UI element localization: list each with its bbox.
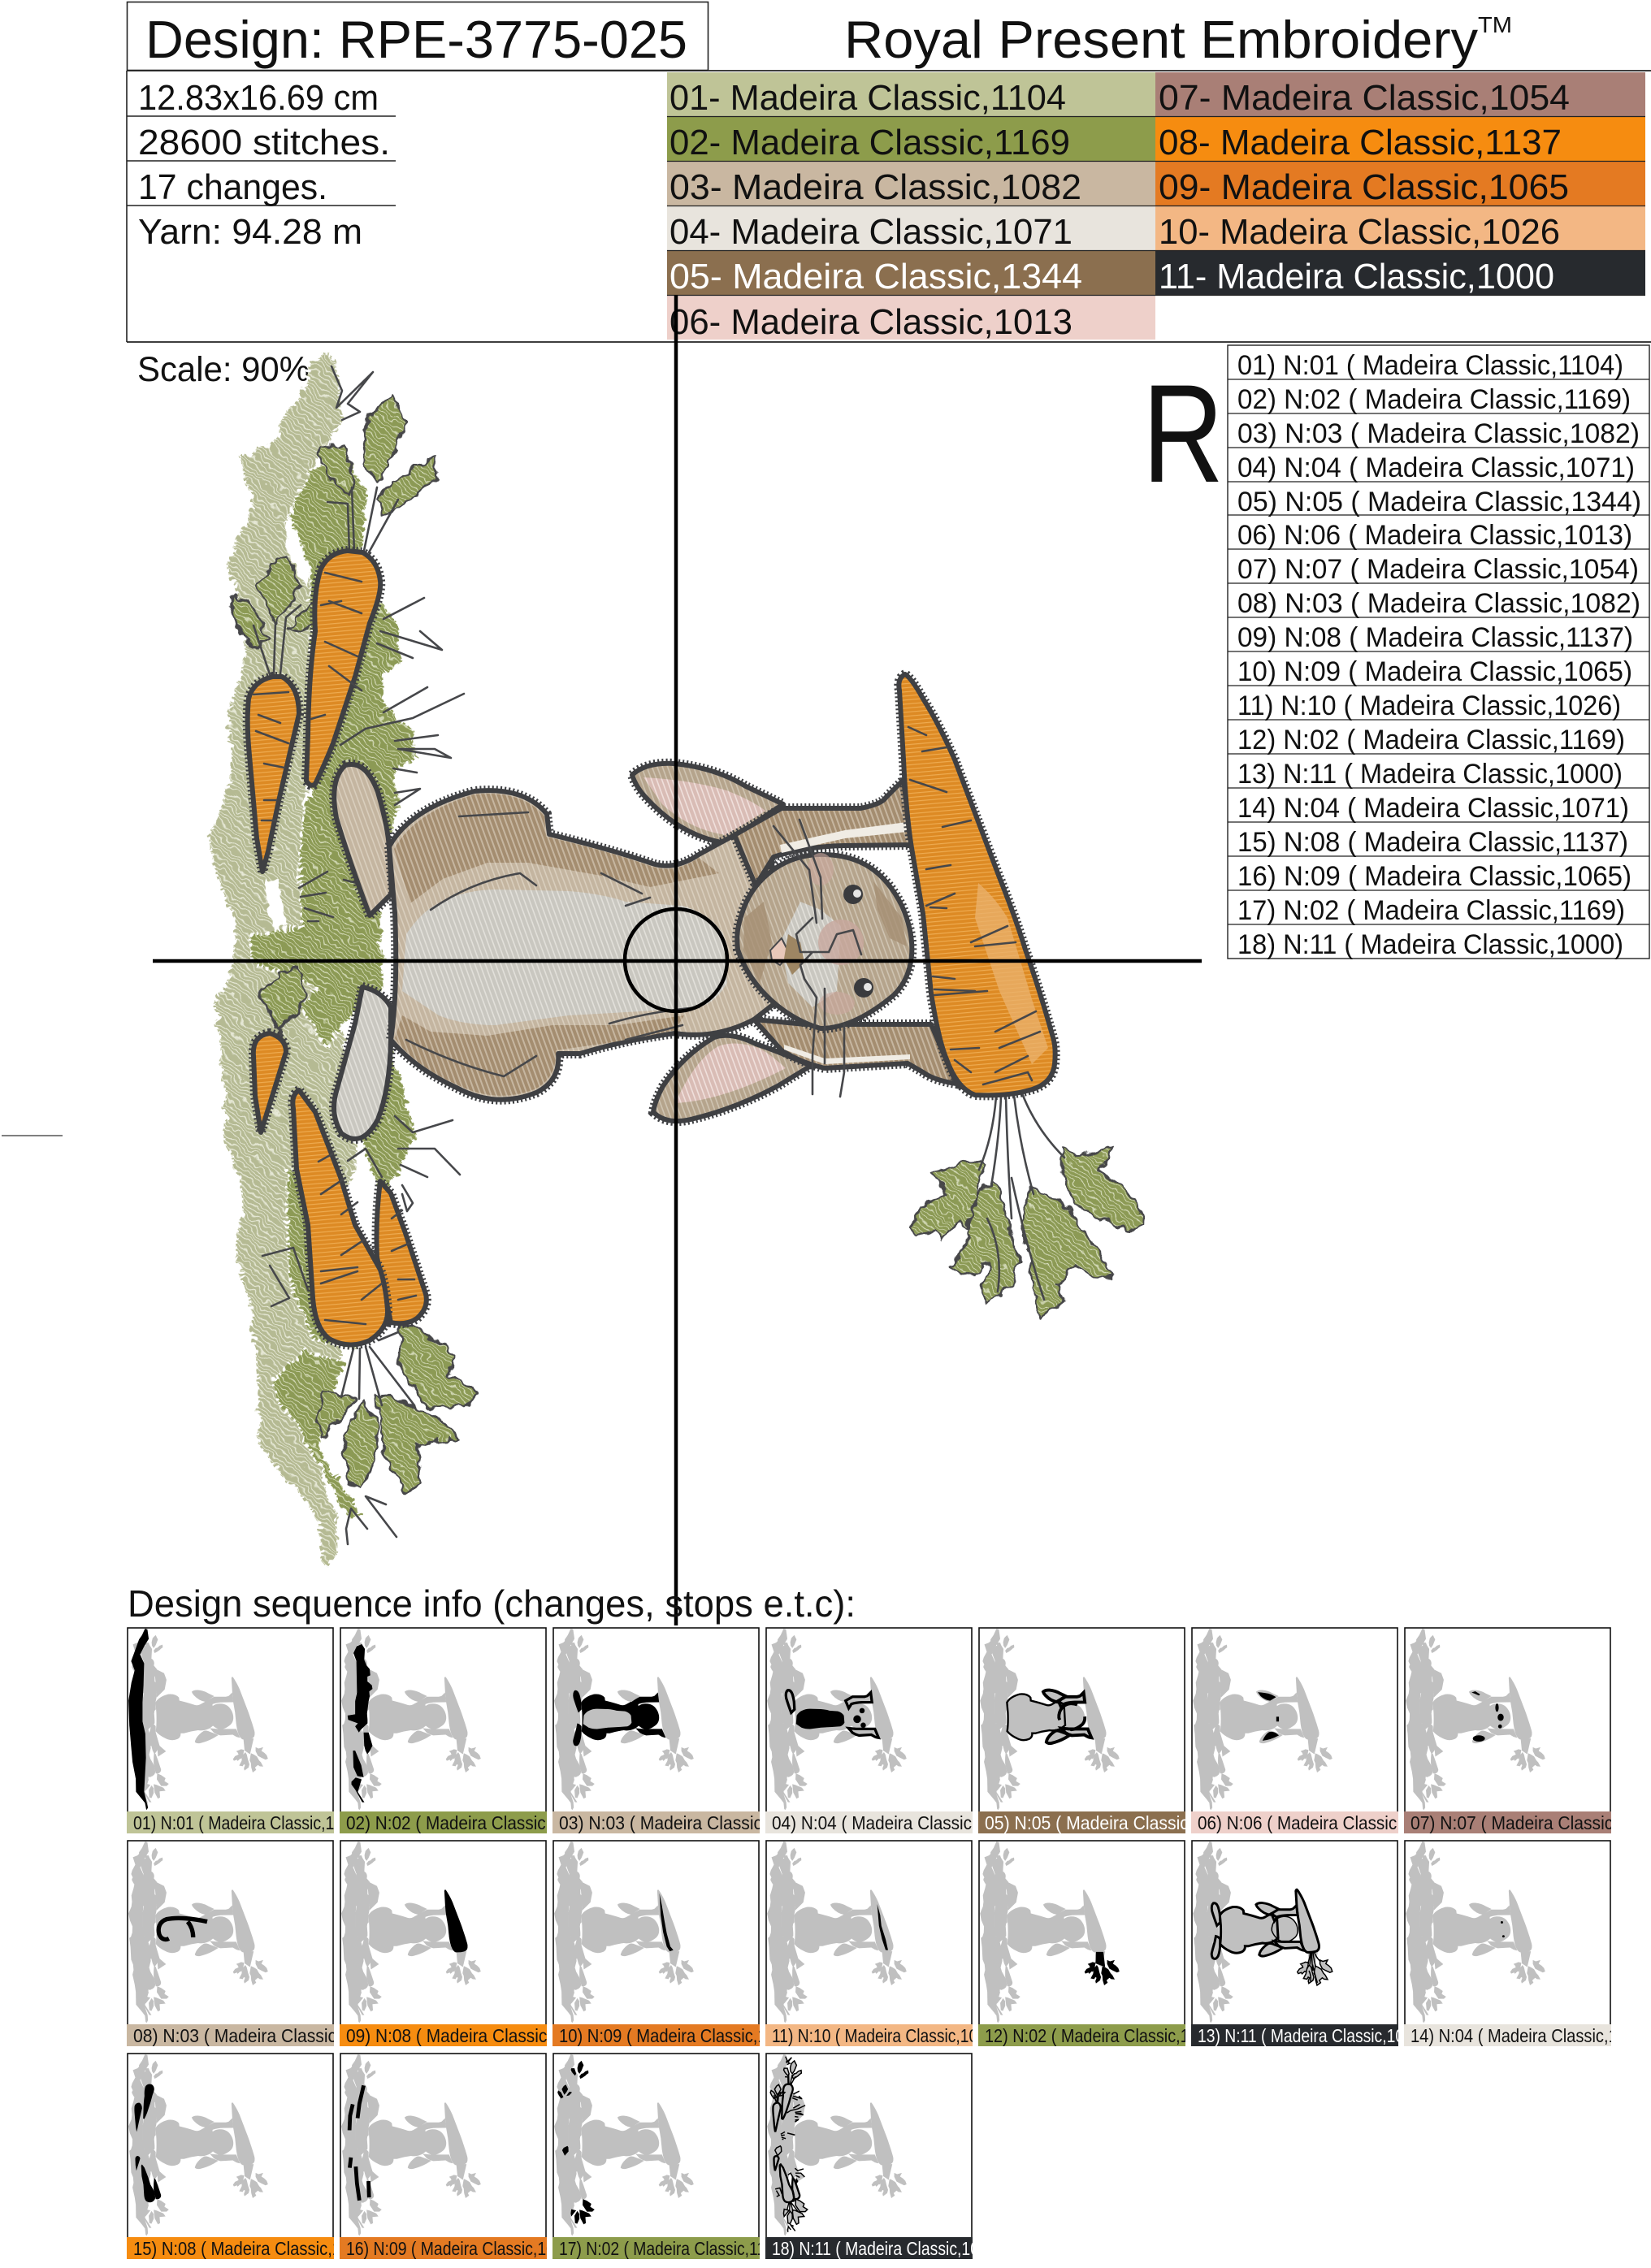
panel: thread colour legend: 03- Madeira Classic,1082 [670,167,1081,207]
header: brand title: Royal Present Embroidery [844,10,1479,69]
big carrot leaves [909,1093,1144,1317]
panel: stitch sequence list: 13) N:11 ( Madeira Classic,1000) [1237,759,1623,790]
panel: thread colour legend: 06- Madeira Classic,1013 [670,302,1072,342]
panel: stitch sequence list: 18) N:11 ( Madeira Classic,1000) [1237,929,1623,960]
header: design name box: Design: RPE-3775-025 [145,10,687,69]
panel: thread colour legend: 08- Madeira Classic,1137 [1159,123,1562,162]
panel: stitch sequence list: 17) N:02 ( Madeira Classic,1169) [1237,895,1625,926]
header: brand title: TM [1478,12,1512,37]
panel: stitch sequence list: 06) N:06 ( Madeira Classic,1013) [1237,520,1632,551]
panel: stitch sequence list: 10) N:09 ( Madeira Classic,1065) [1237,656,1632,687]
panel: stitch sequence list: 02) N:02 ( Madeira Classic,1169) [1237,384,1631,415]
thumbnail 16 [340,2053,578,2259]
rabbit ears [632,764,811,1121]
grass blade outlines [262,366,464,1544]
panel: thread colour legend: 04- Madeira Classic,1071 [670,212,1072,252]
embroidery artwork: rabbit with carrots [208,352,1144,1569]
thumbnail 18 [765,2053,1002,2259]
panel: thread colour legend: 11- Madeira Classic,1000 [1159,257,1554,296]
panel: thread colour legend: 02- Madeira Classic,1169 [670,123,1070,162]
panel: design statistics: 28600 stitches. [138,123,390,162]
thumbnail 07 [1404,1627,1651,1833]
thumbnail 03 [552,1627,811,1833]
panel: stitch sequence list: 07) N:07 ( Madeira Classic,1054) [1237,554,1639,585]
rotation letter R: R [1142,356,1224,512]
panel: stitch sequence list: 12) N:02 ( Madeira Classic,1169) [1237,725,1625,755]
rabbit feet [334,764,392,1139]
thumbnail 14 [1404,1840,1650,2046]
panel: stitch sequence list: 09) N:08 ( Madeira Classic,1137) [1237,622,1633,653]
thumbnail 02 [340,1627,592,1833]
panel: thread colour legend: 05- Madeira Classic,1344 [670,257,1082,296]
panel: stitch sequence list: 04) N:04 ( Madeira Classic,1071) [1237,452,1635,483]
thumbnail 01 [127,1627,365,1833]
panel: stitch sequence list: 14) N:04 ( Madeira Classic,1071) [1237,793,1629,824]
panel: design statistics: Yarn: 94.28 m [138,212,362,252]
grass: light and dark stitched areas [208,352,417,1569]
small carrots: left group [248,551,427,1345]
thumbnail 17 [552,2053,788,2259]
thumbnail 04 [765,1627,1020,1833]
thumbnail 11 [765,1840,1000,2046]
rabbit arms [734,780,956,1084]
centre crosshair and circle [153,295,1202,1625]
panel: design statistics: 17 changes. [138,167,327,207]
panel: thread colour legend: 10- Madeira Classic,1026 [1159,212,1560,252]
thumbnail 09 [340,1840,594,2046]
thumbnail 15 [127,2053,373,2259]
thumbnail 13 [1191,1840,1427,2046]
thumbnail 12 [978,1840,1220,2046]
panel: thread colour legend [667,72,1645,342]
panel: design statistics [127,78,396,252]
panel: thread colour legend: 07- Madeira Classic,1054 [1159,78,1570,118]
heading: design sequence info: Design sequence info (changes, stops e.t.c): [128,1582,856,1625]
left margin tick mark [2,1135,63,1136]
scale label: Scale: 90% [137,350,310,389]
header frame lines [127,71,1651,342]
panel: thread colour legend: 01- Madeira Classic,1104 [670,78,1066,118]
panel: stitch sequence list: 15) N:08 ( Madeira Classic,1137) [1237,827,1628,858]
panel: thread colour legend: 09- Madeira Classic,1065 [1159,167,1569,207]
rabbit body [389,790,780,1100]
panel: stitch sequence list: 11) N:10 ( Madeira Classic,1026) [1237,690,1621,721]
panel: design statistics: 12.83x16.69 cm [138,78,379,118]
carrot leaves: left group [230,395,479,1492]
thumbnail 10 [552,1840,800,2046]
panel: stitch sequence list [1228,345,1649,960]
thumbnail 08 [127,1840,385,2046]
panel: stitch sequence list: 08) N:03 ( Madeira Classic,1082) [1237,588,1640,619]
panel: stitch sequence list: 05) N:05 ( Madeira Classic,1344) [1237,487,1641,517]
thumbnail 06 [1191,1627,1445,1833]
panel: stitch sequence list: 16) N:09 ( Madeira Classic,1065) [1237,861,1632,892]
big carrot [899,674,1055,1095]
thumbnail 05 [978,1627,1237,1833]
panel: stitch sequence list: 01) N:01 ( Madeira Classic,1104) [1237,350,1623,381]
rabbit head [737,820,912,1097]
panel: stitch sequence list: 03) N:03 ( Madeira Classic,1082) [1237,418,1640,449]
